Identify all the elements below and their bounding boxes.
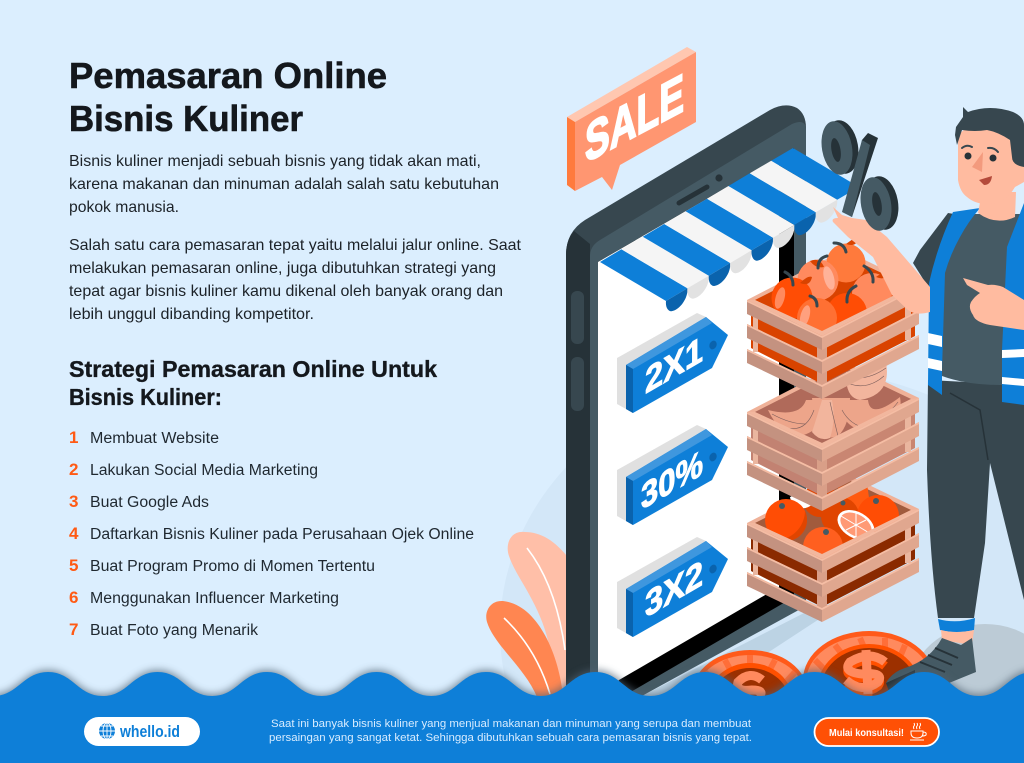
- bananas: [768, 362, 901, 439]
- oranges: [765, 476, 899, 567]
- vest left: [928, 208, 980, 395]
- phone shadow: [640, 612, 830, 697]
- consultation button: Mulai konsultasi!: [829, 728, 904, 739]
- numbered strategy list: Lakukan Social Media Marketing: [90, 462, 318, 479]
- numbered strategy list: Menggunakan Influencer Marketing: [90, 590, 339, 607]
- phone speaker and camera: [679, 174, 723, 203]
- plant leaves: [486, 532, 570, 697]
- numbered strategy list: Buat Google Ads: [90, 494, 209, 511]
- orange crate: [747, 473, 919, 622]
- striped awning: [600, 148, 859, 311]
- intro paragraph 2: Salah satu cara pemasaran tepat yaitu melalui jalur online. Saat: [69, 237, 522, 254]
- title: Pemasaran Online: [69, 55, 387, 96]
- strategy heading: Bisnis Kuliner:: [69, 384, 222, 410]
- footer message: persaingan yang sangat ketat. Sehingga dibutuhkan sebuah cara pemasaran bisnis yang tepat.: [269, 732, 752, 744]
- neck: [978, 192, 1016, 221]
- numbered strategy list: 2: [69, 460, 78, 479]
- man character: [886, 107, 1024, 694]
- price tag 2X1: 2X1: [645, 329, 703, 402]
- intro paragraph 1: karena makanan dan minuman adalah salah satu kebutuhan: [69, 176, 499, 193]
- blue cuff: [938, 618, 975, 632]
- strategy heading: [69, 356, 437, 410]
- percent symbol: [818, 118, 902, 233]
- numbered strategy list: Buat Foto yang Menarik: [90, 622, 258, 639]
- numbered strategy list: Daftarkan Bisnis Kuliner pada Perusahaan Ojek Online: [90, 526, 474, 543]
- raised arm and hand: [833, 207, 930, 314]
- numbered strategy list: 5: [69, 556, 78, 575]
- consultation button: [814, 718, 939, 746]
- intro paragraph 1: Bisnis kuliner menjadi sebuah bisnis yang tidak akan mati,: [69, 153, 481, 170]
- grey floor blob: [909, 624, 1024, 760]
- phone screen: [598, 148, 794, 697]
- title: Bisnis Kuliner: [69, 98, 303, 139]
- shoe: [886, 638, 976, 694]
- title: [69, 55, 387, 139]
- coin right: [804, 631, 927, 696]
- intro paragraph 1: [69, 153, 499, 216]
- numbered strategy list: 1: [69, 428, 78, 447]
- footer message: [269, 718, 752, 744]
- pointing hand: [963, 278, 1024, 330]
- percent ring bottom: [857, 174, 902, 233]
- face: [958, 112, 1024, 204]
- ankle: [941, 630, 974, 645]
- apples: [772, 236, 892, 338]
- intro paragraph 1: pokok manusia.: [69, 199, 179, 216]
- numbered strategy list: Membuat Website: [90, 430, 219, 447]
- footer message: Saat ini banyak bisnis kuliner yang menjual makanan dan minuman yang serupa dan membuat: [271, 718, 751, 730]
- price tag 30%: 30%: [641, 443, 703, 518]
- sleeve: [913, 213, 960, 290]
- price tag 3X2: [617, 537, 728, 637]
- numbered strategy list: [69, 428, 474, 639]
- footer wave shadow: [0, 670, 1024, 720]
- mouth: [979, 176, 992, 185]
- strategy heading: Strategi Pemasaran Online Untuk: [69, 356, 437, 382]
- icon: coffee cup: [910, 723, 926, 740]
- hair: [955, 107, 1024, 167]
- background blob: [500, 370, 1024, 763]
- price tag 2X1: [617, 313, 728, 413]
- intro paragraph 2: melakukan pemasaran online, juga dibutuhkan strategi yang: [69, 260, 496, 277]
- numbered strategy list: 6: [69, 588, 78, 607]
- intro paragraph 2: [69, 237, 522, 323]
- nose: [972, 152, 983, 172]
- whello.id logo pill: whello.id: [119, 722, 180, 741]
- vest right: [1002, 203, 1024, 405]
- numbered strategy list: 3: [69, 492, 78, 511]
- coin left: [700, 650, 802, 696]
- icon: globe: [99, 723, 115, 739]
- numbered strategy list: 4: [69, 524, 79, 543]
- shirt: [930, 214, 1024, 385]
- SALE speech bubble: [567, 47, 696, 191]
- phone: [566, 105, 806, 697]
- banana crate: [747, 362, 919, 511]
- apple crate: [747, 236, 919, 399]
- SALE speech bubble: SALE: [585, 63, 684, 175]
- trousers: [927, 380, 1024, 618]
- price tag 30%: [617, 425, 728, 525]
- numbered strategy list: Buat Program Promo di Momen Tertentu: [90, 558, 375, 575]
- percent slash: [842, 133, 878, 217]
- coins on the floor: [700, 631, 927, 696]
- numbered strategy list: 7: [69, 620, 78, 639]
- intro paragraph 2: lebih unggul dibanding kompetitor.: [69, 306, 314, 323]
- footer wave band: [0, 672, 1024, 763]
- percent ring top: [818, 118, 862, 177]
- whello.id logo pill: [84, 717, 200, 746]
- phone side buttons: [571, 291, 584, 411]
- eyes and brows: [962, 146, 998, 162]
- intro paragraph 2: tepat agar bisnis kuliner kamu dikenal oleh banyak orang dan: [69, 283, 503, 300]
- price tag 3X2: 3X2: [645, 553, 703, 626]
